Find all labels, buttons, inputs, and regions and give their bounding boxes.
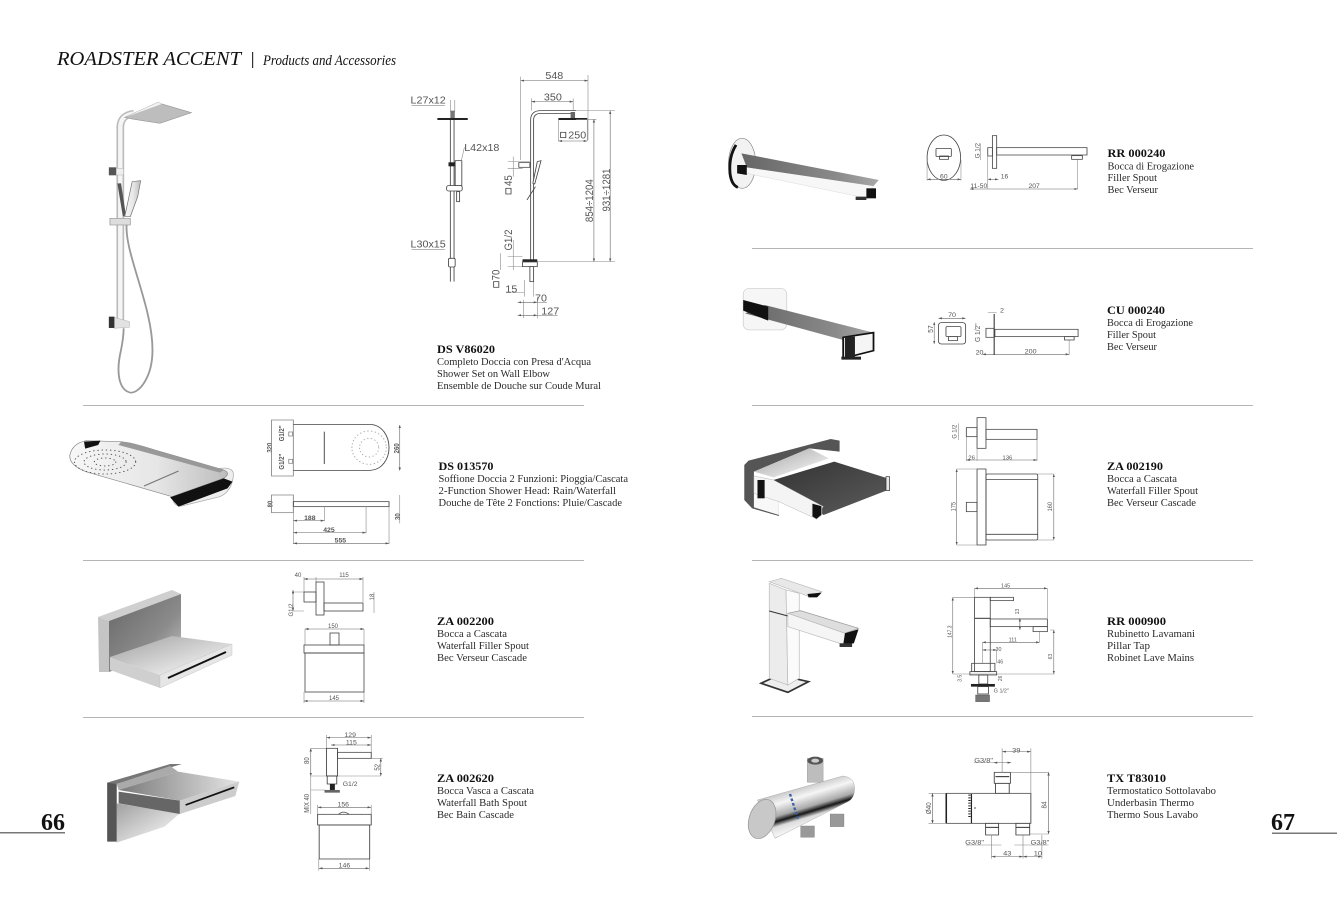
text: ZA 002620: Waterfall Bath Spout (437, 798, 527, 809)
technical drawing: framed waterfall spout: G 1/2 (952, 425, 958, 439)
text: ZA 002200: Bec Verseur Cascade (437, 653, 527, 664)
text: RR 000900 (1107, 614, 1195, 664)
text: RR 000900: RR 000900 (1107, 614, 1166, 628)
text: RR 000240: Bocca di Erogazione (1108, 162, 1194, 172)
technical drawing: shower head (267, 420, 402, 545)
text: DS 013570: DS 013570 (438, 459, 494, 473)
technical drawing: square filler spout: G 1/2" (975, 323, 982, 342)
technical drawing: framed waterfall spout (951, 418, 1054, 545)
technical drawing: shower head: 555 (335, 538, 347, 545)
text: DS 013570 (438, 459, 628, 509)
text: TX T83010: Underbasin Thermo (1107, 798, 1194, 809)
text: TX T83010: TX T83010 (1107, 771, 1166, 785)
text: ZA 002200 (437, 614, 529, 664)
technical drawing: square filler spout: 2 (1000, 308, 1004, 315)
photo: thermostatic valve (744, 757, 855, 841)
page heading (56, 48, 396, 70)
technical drawing: waterfall spout: 150 (328, 624, 339, 630)
page number 66: 66 (41, 810, 65, 836)
technical drawing: shower set: 70 (491, 269, 503, 280)
technical drawing: pillar tap: 46 (997, 659, 1003, 665)
technical drawing: pillar tap: 63 (1048, 654, 1054, 659)
technical drawing: round filler spout: 207 (1029, 183, 1040, 190)
product: CU 000240 filler spout (743, 288, 1193, 360)
photo: square filler spout (743, 288, 874, 360)
text: DS 013570: Soffione Doccia 2 Funzioni: Pioggia/Cascata (438, 474, 628, 485)
photo: bath spout (107, 764, 239, 843)
product: RR 000900 pillar tap (761, 578, 1195, 702)
text: DS V86020: Shower Set on Wall Elbow (437, 369, 550, 380)
technical drawing: shower set (411, 71, 615, 318)
technical drawing: shower set: 45 (504, 175, 515, 186)
technical drawing: pillar tap: 26 (998, 675, 1004, 681)
technical drawing: shower set: 250 (568, 131, 587, 141)
text: ZA 002620 (437, 771, 534, 821)
text: RR 000900: Robinet Lave Mains (1107, 653, 1194, 664)
technical drawing: square filler spout: 20 (976, 349, 984, 356)
text: CU 000240: Bocca di Erogazione (1107, 318, 1193, 329)
technical drawing: shower set: 127 (541, 307, 560, 317)
technical drawing: thermostatic valve: G3/8" (1031, 840, 1050, 846)
text: ZA 002190: Waterfall Filler Spout (1107, 486, 1198, 497)
text: ZA 002620: Bec Bain Cascade (437, 810, 514, 821)
technical drawing: pillar tap (947, 584, 1055, 702)
technical drawing: shower head: 320 (267, 442, 274, 453)
technical drawing: shower set: G1/2 (504, 229, 515, 250)
technical drawing: round filler spout: 16 (1001, 174, 1009, 181)
product: ZA 002200 waterfall spout (98, 573, 529, 703)
technical drawing: shower set: L42x18 (464, 143, 500, 154)
page number 67: 67 (1271, 810, 1295, 836)
technical drawing: shower head: 30 (395, 513, 402, 520)
technical drawing: thermostatic valve: 43 (1003, 851, 1012, 857)
text: DS 013570: 2-Function Shower Head: Rain/Waterfall (438, 486, 616, 497)
text: CU 000240 (1107, 303, 1193, 353)
text: DS V86020: DS V86020 (437, 342, 495, 356)
technical drawing: bath spout: G1/2 (343, 781, 358, 788)
photo: round filler spout (729, 138, 879, 200)
photo: shower head (70, 441, 233, 507)
text: RR 000240 (1108, 146, 1194, 196)
product: TX T83010 thermostat (744, 748, 1216, 859)
text: DS V86020: Completo Doccia con Presa d'Acqua (437, 357, 591, 368)
technical drawing: thermostatic valve: 39 (1012, 748, 1021, 754)
technical drawing: shower head: G1/2" (279, 454, 286, 470)
technical drawing: shower set: 70 (535, 294, 547, 304)
technical drawing: shower head: 260 (394, 443, 401, 453)
text: RR 000240: Bec Verseur (1108, 185, 1158, 196)
page heading: ROADSTER ACCENT (56, 48, 243, 70)
technical drawing: thermostatic valve: G3/8" (974, 758, 994, 764)
technical drawing: thermostatic valve: Ø40 (926, 802, 933, 814)
text: DS V86020: Ensemble de Douche sur Coude Mural (437, 381, 601, 392)
technical drawing: shower set: 548 (545, 71, 564, 82)
technical drawing: framed waterfall spout: 160 (1048, 501, 1054, 511)
technical drawing: pillar tap: 145 (1001, 584, 1010, 590)
text: ZA 002620: ZA 002620 (437, 771, 494, 785)
technical drawing: waterfall spout: 145 (329, 696, 340, 702)
technical drawing: pillar tap: 147.3 (947, 625, 953, 638)
text: ZA 002200: ZA 002200 (437, 614, 494, 628)
technical drawing: shower set: L27x12 (411, 96, 446, 106)
text: RR 000900: Rubinetto Lavamani (1107, 629, 1195, 640)
text: DS V86020 (437, 342, 601, 392)
technical drawing: framed waterfall spout: 26 (968, 455, 975, 461)
technical drawing: bath spout (304, 732, 383, 871)
text: CU 000240: CU 000240 (1107, 303, 1165, 317)
technical drawing: pillar tap: 13 (1015, 609, 1021, 614)
technical drawing: shower head: 425 (323, 527, 335, 534)
photo: framed waterfall spout (744, 439, 890, 519)
technical drawing: pillar tap: 3.5 (958, 675, 964, 682)
product: DS V86020 shower set (109, 71, 615, 393)
technical drawing: bath spout: 52 (374, 764, 381, 771)
photo: waterfall spout (98, 590, 232, 688)
technical drawing: bath spout: 115 (346, 740, 357, 746)
technical drawing: square filler spout: 200 (1025, 349, 1037, 356)
text: RR 000240: RR 000240 (1108, 146, 1166, 160)
technical drawing: bath spout: MIX 40 (304, 793, 311, 813)
technical drawing: waterfall spout: 40 (295, 573, 302, 579)
technical drawing: thermostatic valve: 84 (1041, 801, 1049, 809)
technical drawing: bath spout: 80 (304, 757, 311, 764)
text: ZA 002190: ZA 002190 (1107, 459, 1163, 473)
technical drawing: framed waterfall spout: 136 (1002, 455, 1012, 461)
technical drawing: waterfall spout: 18 (370, 593, 376, 600)
technical drawing: round filler spout: G 1/2 (974, 143, 982, 158)
page number 66 (0, 810, 65, 836)
text: RR 000900: Pillar Tap (1107, 641, 1150, 652)
product: RR 000240 filler spout (729, 135, 1194, 200)
technical drawing: shower set: 350 (544, 93, 562, 103)
text: TX T83010: Termostatico Sottolavabo (1107, 786, 1216, 797)
text: ZA 002620: Bocca Vasca a Cascata (437, 786, 534, 797)
text: ZA 002190: Bocca a Cascata (1107, 474, 1177, 485)
technical drawing: round filler spout (927, 135, 1087, 190)
technical drawing: shower set: 931÷1281 (601, 168, 613, 211)
product: DS 013570 shower head (70, 420, 628, 545)
technical drawing: shower set: 854÷1204 (584, 179, 596, 222)
technical drawing: waterfall spout: G1/2 (289, 603, 295, 617)
technical drawing: pillar tap: 30 (995, 647, 1002, 653)
technical drawing: waterfall spout (289, 573, 376, 703)
technical drawing: pillar tap: 111 (1009, 638, 1017, 644)
text: DS 013570: Douche de Tête 2 Fonctions: Pluie/Cascade (438, 498, 622, 509)
technical drawing: thermostatic valve (926, 748, 1050, 859)
technical drawing: square filler spout (928, 308, 1078, 356)
technical drawing: round filler spout: 11-50 (970, 183, 988, 190)
technical drawing: bath spout: 156 (338, 802, 349, 808)
product: ZA 002190 waterfall spout (744, 418, 1198, 545)
technical drawing: bath spout: 129 (344, 732, 356, 739)
technical drawing: pillar tap: G 1/2" (994, 689, 1009, 695)
technical drawing: square filler spout: 70 (948, 312, 956, 319)
text: CU 000240: Bec Verseur (1107, 342, 1157, 353)
technical drawing: bath spout: 146 (339, 863, 351, 869)
technical drawing: shower head: G1/2" (279, 425, 286, 441)
technical drawing: thermostatic valve: 10 (1034, 851, 1042, 857)
page heading: Products and Accessories (262, 53, 396, 69)
technical drawing: shower head: 80 (267, 500, 275, 507)
technical drawing: shower set: L30x15 (411, 240, 446, 250)
technical drawing: waterfall spout: 115 (339, 573, 349, 579)
text: ZA 002190: Bec Verseur Cascade (1107, 498, 1196, 509)
text: RR 000240: Filler Spout (1108, 173, 1157, 184)
text: TX T83010 (1107, 771, 1216, 821)
text: CU 000240: Filler Spout (1107, 330, 1156, 341)
text: ZA 002200: Waterfall Filler Spout (437, 641, 529, 652)
technical drawing: framed waterfall spout: 175 (951, 501, 958, 511)
text: ZA 002190 (1107, 459, 1198, 509)
text: TX T83010: Thermo Sous Lavabo (1107, 810, 1198, 821)
technical drawing: shower set: 15 (505, 285, 518, 295)
technical drawing: shower head: 188 (304, 515, 316, 522)
photo: pillar tap (761, 578, 859, 692)
text: ZA 002200: Bocca a Cascata (437, 629, 507, 640)
technical drawing: square filler spout: 57 (928, 325, 935, 333)
technical drawing: round filler spout: 60 (940, 174, 948, 181)
product: ZA 002620 bath spout (107, 732, 534, 871)
technical drawing: thermostatic valve: G3/8" (965, 840, 985, 846)
page number 67 (1271, 810, 1337, 836)
photo: shower set (109, 102, 191, 393)
